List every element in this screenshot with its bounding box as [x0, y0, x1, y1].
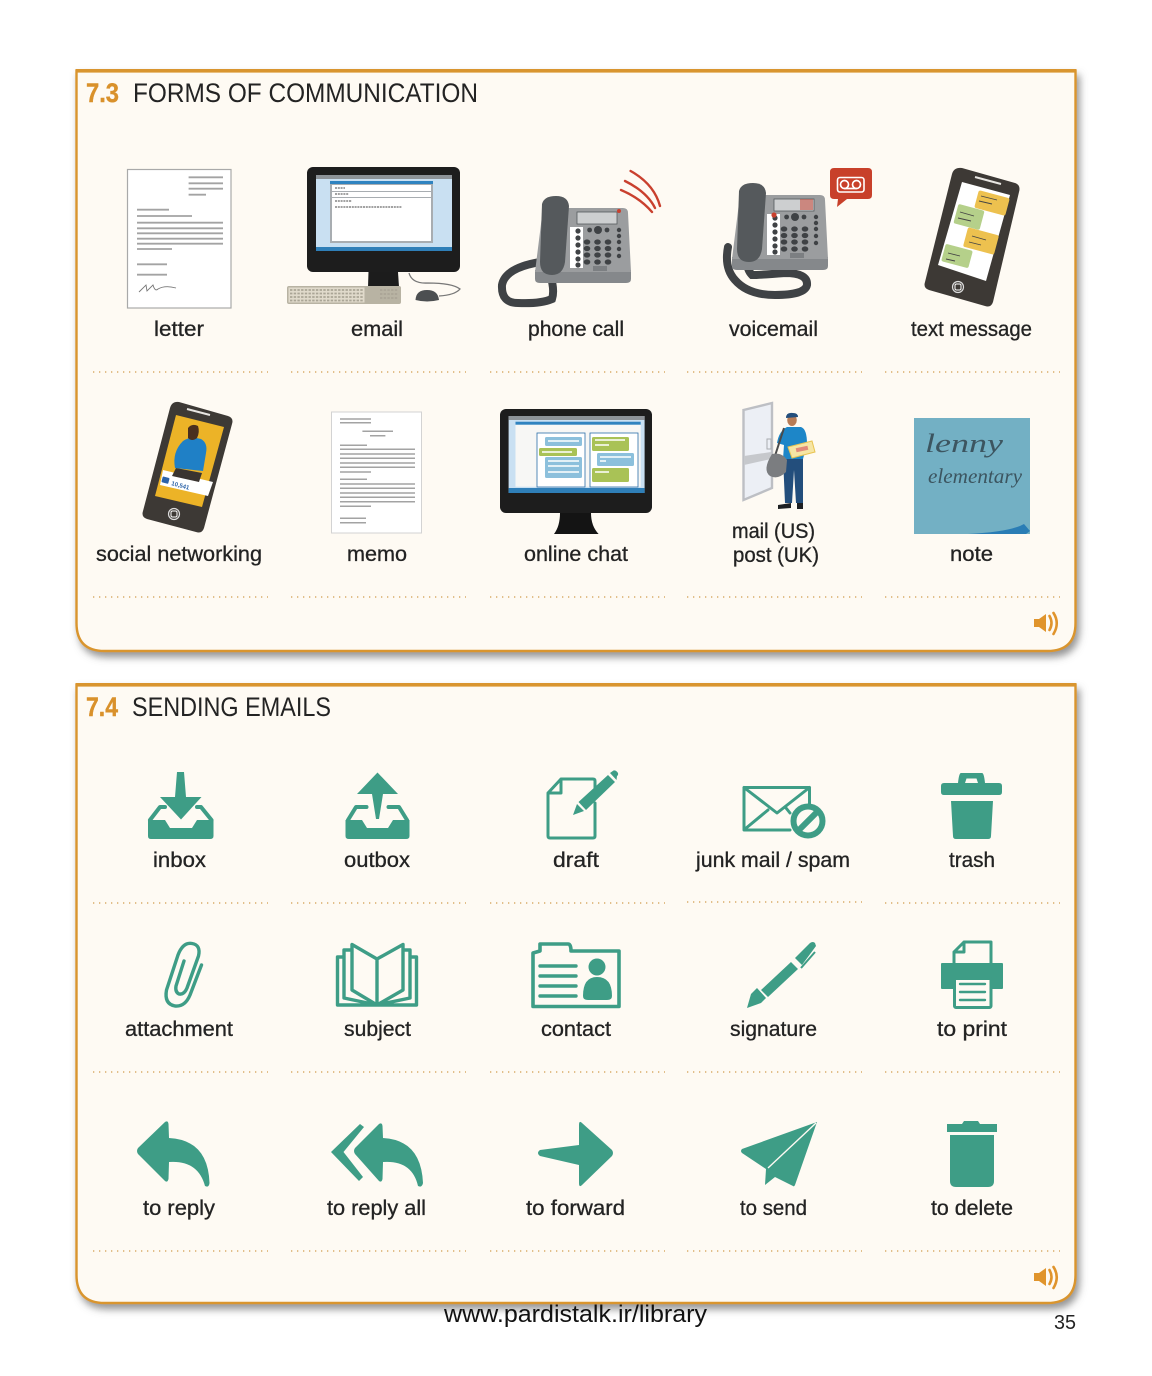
item: social networking: [96, 402, 262, 566]
icon: letter: [128, 170, 231, 308]
item: mail / post: [732, 403, 819, 567]
item: contact: [533, 944, 619, 1041]
icon: audio speaker: [1034, 613, 1057, 634]
page number: 35: [1054, 1312, 1076, 1334]
icon: document and pencil: [548, 770, 618, 838]
panel: 7.4 sending emails: [76, 683, 1076, 1303]
icon: desktop computer with email: [287, 167, 460, 304]
label: contact: contact: [541, 1018, 611, 1041]
label: outbox: outbox: [344, 849, 411, 872]
item: inbox: [148, 772, 214, 872]
label: memo: memo: [347, 543, 407, 566]
website footer: www.pardistalk.ir/library: [443, 1301, 707, 1328]
label: text message: text message: [911, 318, 1032, 341]
label: note: note: [950, 543, 993, 566]
icon: sticky note: [914, 418, 1030, 534]
item: to print: [937, 942, 1007, 1041]
item: letter: [128, 170, 231, 341]
heading: 7.4: SENDING EMAILS: [132, 692, 331, 722]
icon: sticky note: lenny: [925, 429, 1004, 458]
item: outbox: [344, 772, 411, 872]
icon: paper clip: [166, 943, 202, 1006]
heading: 7.4: 7.4: [86, 692, 118, 722]
item: signature: [730, 942, 817, 1041]
item: phone call: [502, 171, 660, 341]
icon: desktop with chat window: [500, 409, 652, 534]
label: trash: trash: [949, 849, 995, 872]
icon: mail carrier at a door: [744, 403, 815, 509]
item: online chat: [500, 409, 652, 566]
icon: sticky note: elementary: [928, 464, 1023, 488]
item: draft: [548, 770, 618, 872]
item: note: [914, 418, 1030, 566]
icon: smartphone with social post: 10,541: [170, 481, 190, 492]
label: attachment: attachment: [125, 1018, 233, 1041]
icon: printer: [941, 942, 1003, 1008]
heading: 7.3: 7.3: [86, 78, 119, 108]
icon: inbox tray with down arrow: [148, 772, 214, 839]
item: trash: [941, 773, 1002, 872]
icon: tray with up arrow: [346, 772, 410, 839]
heading: 7.3: FORMS OF COMMUNICATION: [133, 78, 478, 108]
item: to send: [740, 1122, 817, 1220]
item: to delete: [931, 1121, 1013, 1220]
icon: desk phone with voicemail bubble: [727, 168, 872, 295]
icon: contact card: [533, 944, 619, 1006]
item: junk mail / spam: [695, 788, 850, 872]
label: to delete: to delete: [931, 1197, 1013, 1220]
label: junk mail / spam: junk mail / spam: [695, 849, 850, 872]
icon: ringing desk phone: [502, 171, 660, 303]
item: text message: [911, 168, 1032, 341]
item: to forward: [526, 1122, 625, 1220]
label: online chat: online chat: [524, 543, 628, 566]
label: draft: draft: [553, 849, 599, 872]
label: phone call: phone call: [528, 318, 624, 341]
label: mail (US) post (UK): mail (US): [732, 520, 815, 543]
icon: forward arrow: [538, 1122, 613, 1186]
item: attachment: [125, 943, 233, 1041]
label: to send: to send: [740, 1197, 807, 1220]
label: inbox: inbox: [153, 849, 207, 872]
item: voicemail: [727, 168, 872, 341]
label: social networking: social networking: [96, 543, 262, 566]
label: to reply: to reply: [143, 1197, 216, 1220]
icon: memo document: [332, 412, 422, 533]
label: to print: to print: [937, 1018, 1007, 1041]
label: signature: signature: [730, 1018, 817, 1041]
icon: narrow trash can: [947, 1121, 997, 1187]
icon: audio speaker: [1034, 1267, 1057, 1288]
label: mail (US) post (UK): post (UK): [733, 544, 819, 567]
icon: paper plane: [741, 1122, 817, 1186]
label: voicemail: voicemail: [729, 318, 818, 341]
icon: fountain pen: [747, 942, 816, 1008]
icon: smartphone with social post: [142, 402, 232, 532]
icon: trash can: [941, 773, 1002, 839]
label: to reply all: to reply all: [327, 1197, 426, 1220]
label: mail (US) post (UK): [732, 520, 819, 567]
item: memo: [332, 412, 422, 566]
label: to forward: to forward: [526, 1197, 625, 1220]
label: email: email: [351, 318, 403, 341]
icon: reply all arrows: [331, 1123, 423, 1187]
label: subject: subject: [344, 1018, 411, 1041]
icon: smartphone with text messages: [924, 168, 1020, 306]
panel: 7.3 forms of communication: [76, 69, 1076, 651]
item: to reply: [137, 1121, 216, 1220]
icon: envelope with no symbol: [744, 788, 822, 836]
icon: open book: [338, 944, 416, 1005]
item: email: [287, 167, 460, 341]
item: to reply all: [327, 1123, 426, 1220]
item: subject: [338, 944, 416, 1041]
icon: reply arrow: [137, 1121, 210, 1187]
label: letter: letter: [154, 318, 204, 341]
